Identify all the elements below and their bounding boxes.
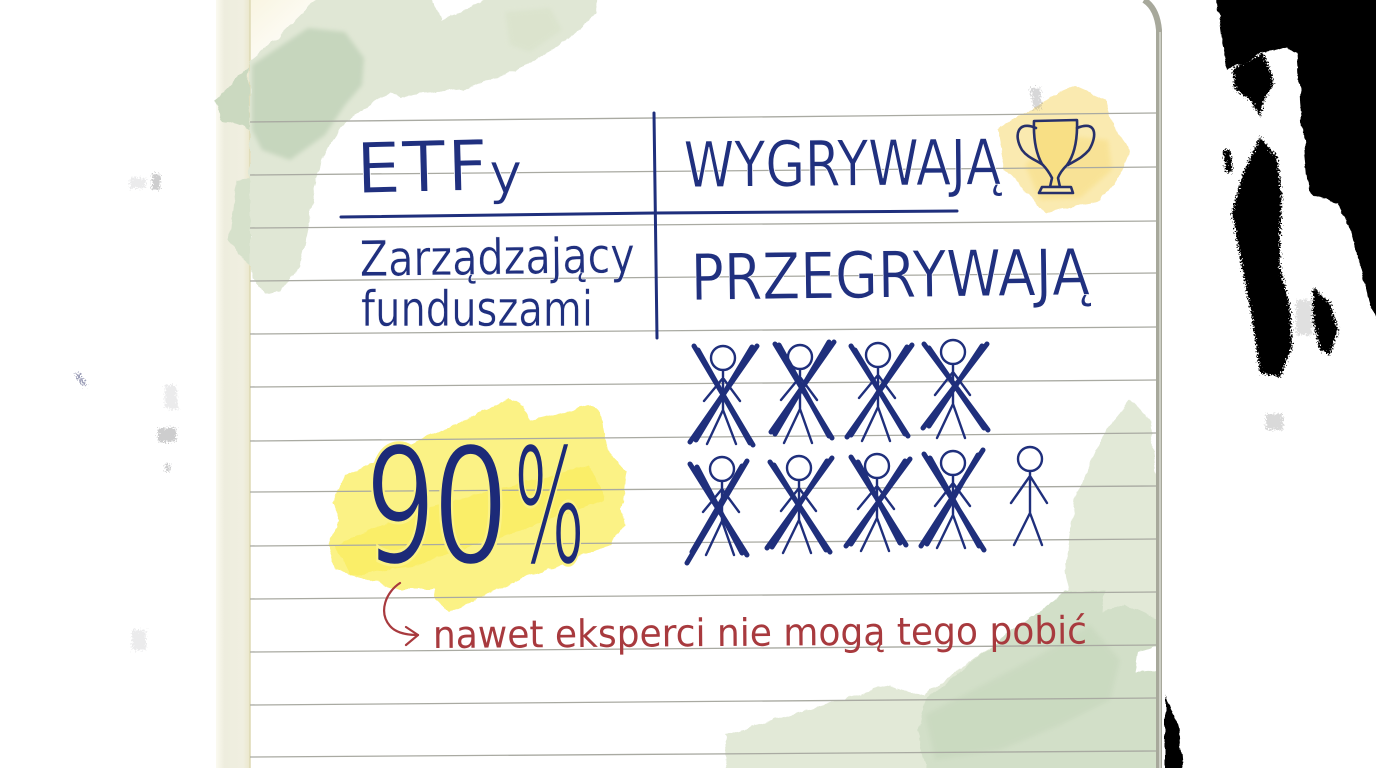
heading: ETFy <box>355 125 522 210</box>
digit 9: 9 <box>365 413 436 601</box>
figure 1 crossed <box>690 346 757 445</box>
black background bottom right <box>1165 695 1183 768</box>
heading: PRZEGRYWAJĄ: PRZEGRYWAJĄ <box>690 236 1092 316</box>
table grid lines <box>341 113 957 338</box>
ink specks left page <box>74 88 1042 650</box>
figure 8 crossed <box>921 450 984 550</box>
letter y: y <box>489 142 522 207</box>
stat: 90% <box>365 413 585 602</box>
notebook right edge <box>1144 0 1160 768</box>
watercolor: bottom right green <box>725 400 1170 768</box>
figure 4 crossed <box>923 340 988 438</box>
figure 3 crossed <box>847 343 912 441</box>
letters ETF: ETF <box>355 125 489 210</box>
yellow splash behind trophy <box>998 87 1130 214</box>
black torn background top right <box>1215 0 1376 325</box>
yellow highlighter splash behind 90% <box>328 398 627 612</box>
figure 7 crossed <box>846 454 910 551</box>
watercolor: top left green <box>215 0 598 293</box>
black ink smudges <box>1223 53 1338 430</box>
text: Zarządzający: Zarządzający <box>359 227 635 288</box>
ruled notebook lines <box>250 113 1156 757</box>
figure 2 crossed <box>771 342 834 443</box>
figure 5 crossed <box>687 457 747 563</box>
text: funduszami: funduszami <box>361 281 593 338</box>
icon: trophy <box>1018 120 1094 193</box>
figure 9 standing <box>1011 447 1047 545</box>
notebook paper <box>250 0 1160 768</box>
caption: nawet eksperci nie mogą tego pobić: nawet eksperci nie mogą tego pobić <box>433 608 1087 657</box>
percent sign: % <box>514 413 585 602</box>
heading: WYGRYWAJĄ: WYGRYWAJĄ <box>683 126 1003 202</box>
digit 0: 0 <box>432 413 509 601</box>
label: Zarządzający funduszami <box>359 227 635 338</box>
figure 6 crossed <box>767 456 832 553</box>
notebook spine <box>216 0 250 768</box>
stick figures pictogram <box>687 340 1047 563</box>
arrow to caption <box>384 583 418 645</box>
